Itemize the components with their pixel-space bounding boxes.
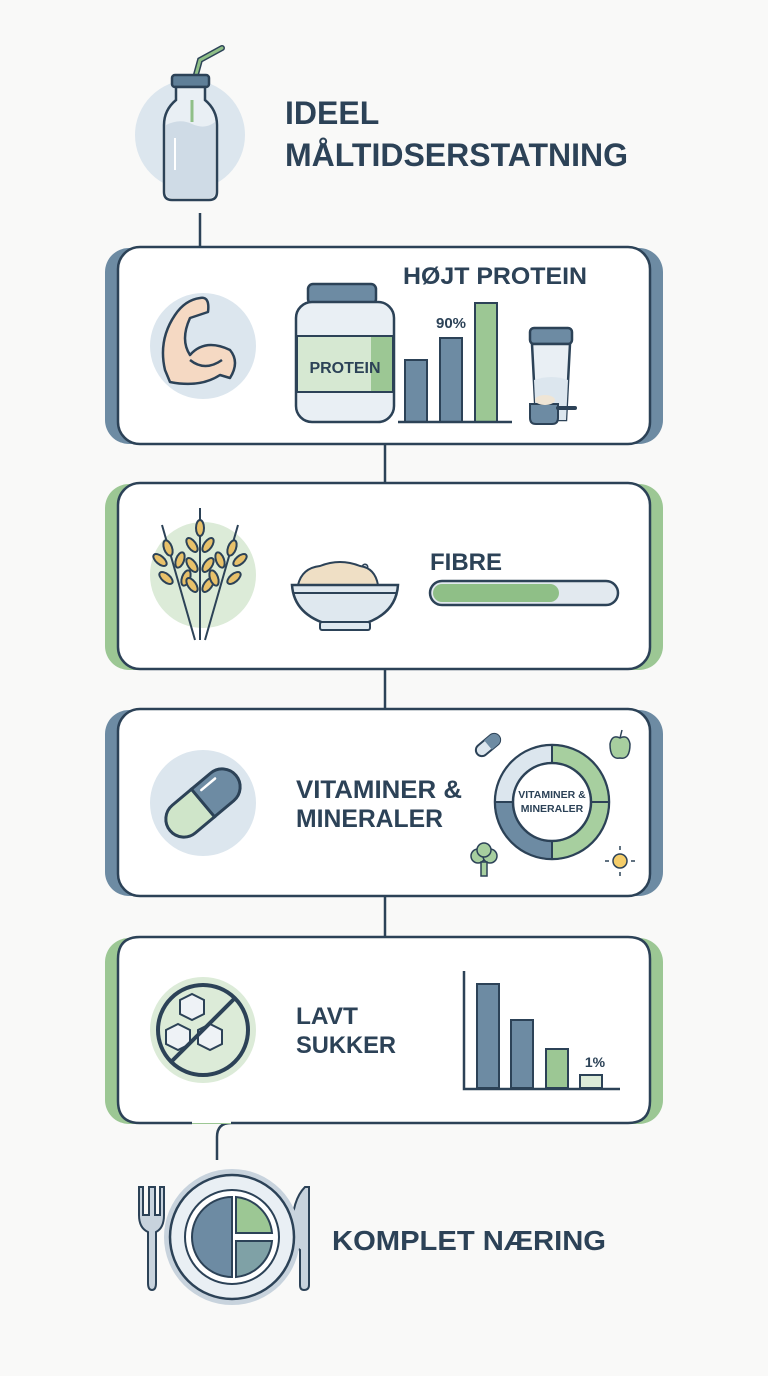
- heading: MINERALER: [296, 805, 443, 833]
- title: [285, 95, 628, 173]
- title: IDEEL: [285, 95, 379, 131]
- heading: FIBRE: [430, 549, 502, 576]
- title: MÅLTIDSERSTATNING: [285, 137, 628, 173]
- heading: SUKKER: [296, 1032, 396, 1059]
- icon: capsule: [150, 750, 256, 856]
- donut chart: [495, 745, 609, 859]
- footer heading: KOMPLET NÆRING: [332, 1225, 606, 1256]
- icon: protein jar: [296, 284, 394, 422]
- panel 4: lavt sukker: [105, 937, 663, 1124]
- icon: oat bowl: [292, 562, 398, 630]
- heading: [296, 776, 462, 833]
- header: bottle icon: [135, 48, 245, 200]
- icon: no sugar: [150, 977, 256, 1083]
- heading: LAVT: [296, 1003, 358, 1030]
- icon: muscle arm: [150, 293, 256, 399]
- bar chart: 90%: [436, 315, 466, 332]
- icon: protein jar: PROTEIN: [309, 360, 381, 377]
- icon: shaker: [530, 328, 575, 424]
- progress bar: [430, 581, 618, 605]
- heading: [296, 1003, 396, 1059]
- panel 1: højt protein: [105, 247, 663, 444]
- connector lines: [200, 213, 385, 1160]
- footer: plate with fork and knife: [139, 1169, 309, 1305]
- heading: HØJT PROTEIN: [403, 263, 587, 290]
- icon: small pill: [473, 731, 503, 759]
- bar chart: [398, 303, 512, 422]
- icon: apple: [610, 730, 630, 758]
- icon: broccoli: [471, 843, 497, 876]
- panel 3: vitaminer: [105, 709, 663, 896]
- icon: sun: [605, 846, 635, 876]
- bar chart: [464, 971, 620, 1089]
- panel 2: fibre: [105, 483, 663, 670]
- icon: wheat: [150, 508, 256, 640]
- donut chart: VITAMINER &: [518, 789, 586, 801]
- bar chart: 1%: [585, 1054, 606, 1070]
- donut chart: MINERALER: [521, 803, 584, 815]
- heading: VITAMINER &: [296, 776, 462, 804]
